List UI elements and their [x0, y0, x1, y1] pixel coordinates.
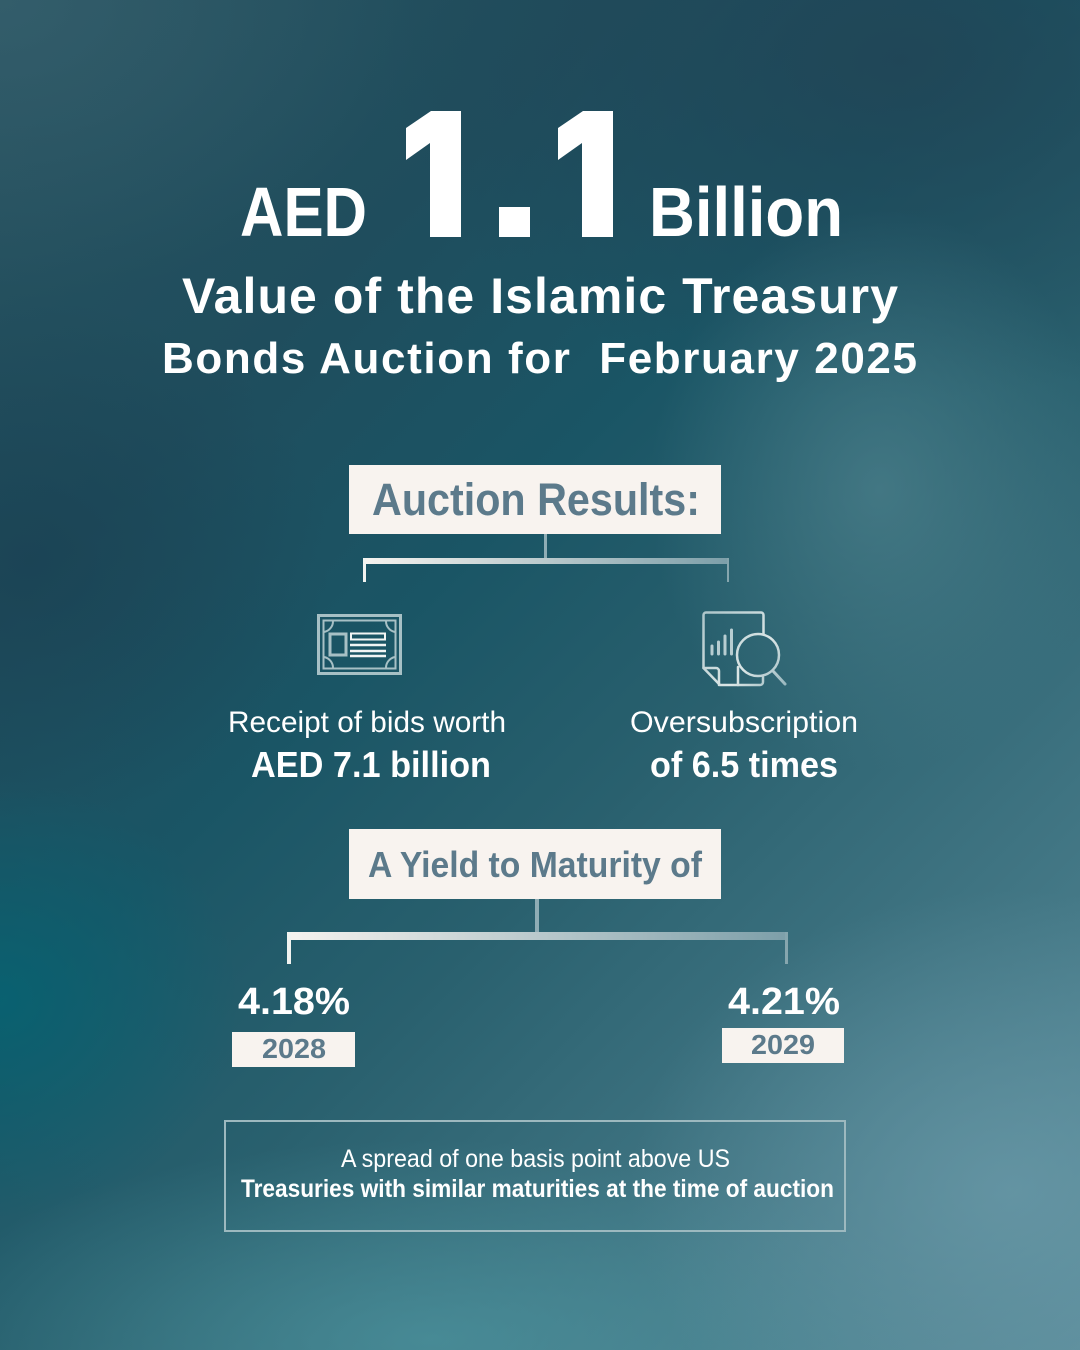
text: oversubscription: of 6.5 times [650, 744, 838, 785]
panel: yield to maturity heading [349, 829, 721, 899]
panel: auction results heading: Auction Results: [372, 474, 700, 525]
headline figure: 1.1 [397, 79, 647, 275]
text: bids received: AED 7.1 billion [251, 744, 491, 785]
text: bids received: Receipt of bids worth [228, 706, 506, 739]
headline figure [242, 111, 840, 237]
text: oversubscription: Oversubscription [630, 706, 858, 739]
text: bids received [228, 706, 506, 785]
stat: 2028 yield: 2028 [262, 1033, 326, 1064]
connector: auction results bracket [363, 534, 729, 582]
headline figure: Billion [649, 173, 843, 251]
subtitle [162, 268, 917, 383]
callout: spread note: A spread of one basis point above US [341, 1145, 730, 1173]
stat: 2028 yield: 4.18% [238, 981, 350, 1023]
icon: bond certificate [318, 616, 400, 674]
icon: report with magnifier [704, 612, 785, 685]
subtitle: Value of the Islamic Treasury [182, 268, 898, 324]
text: oversubscription [630, 706, 858, 785]
stat: 2029 yield [722, 981, 844, 1063]
stat: 2029 yield: 4.21% [728, 981, 840, 1023]
title [164, 111, 916, 382]
panel: auction results heading [349, 465, 721, 534]
connector: yield bracket [287, 899, 788, 964]
subtitle: Bonds Auction for February 2025 [162, 334, 917, 383]
panel: yield to maturity heading: A Yield to Maturity of [368, 844, 703, 885]
headline figure: AED [240, 173, 367, 251]
stat: 2029 yield: 2029 [751, 1029, 815, 1060]
callout: spread note [225, 1121, 845, 1231]
stat: 2028 yield [232, 981, 355, 1067]
callout: spread note: Treasuries with similar maturities at the time of auction [241, 1175, 834, 1203]
infographic content [164, 111, 916, 1232]
